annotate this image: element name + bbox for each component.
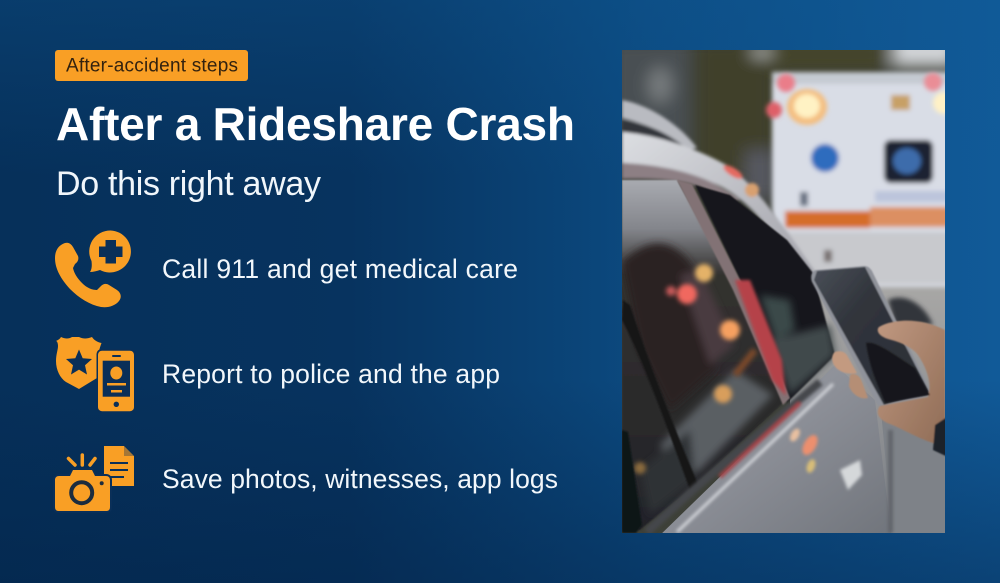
road [790,280,950,535]
phone [811,266,930,406]
step 2: report [56,337,500,412]
step text: Save photos, witnesses, app logs [162,464,558,494]
blurred background trees [622,50,945,204]
car door [662,367,886,533]
icon: police badge and phone [56,337,136,412]
icon: camera and document [53,446,134,513]
window pillars [677,180,790,405]
window reflections [622,244,773,515]
hand holding phone [832,321,950,458]
step 3: save evidence [53,446,558,513]
badge: After-accident steps: After-accident steps [66,56,238,76]
title: After a Rideshare Crash [56,98,575,150]
step text: Report to police and the app [162,359,500,389]
dark wheel behind hand [888,298,933,325]
badge: After-accident steps [55,50,248,81]
emergency lights [766,73,955,125]
step text: Call 911 and get medical care [162,254,518,284]
photo: person with phone beside car and ambulance [622,50,945,533]
rear window glass [622,180,783,530]
blurred ambulance [772,72,957,287]
subtitle: Do this right away [56,165,321,203]
car roof and rail [622,100,815,285]
front window [695,185,835,403]
icon: phone with medical bubble [55,230,131,307]
door sill and reflections [647,382,893,533]
step 1: call 911 [55,230,518,307]
